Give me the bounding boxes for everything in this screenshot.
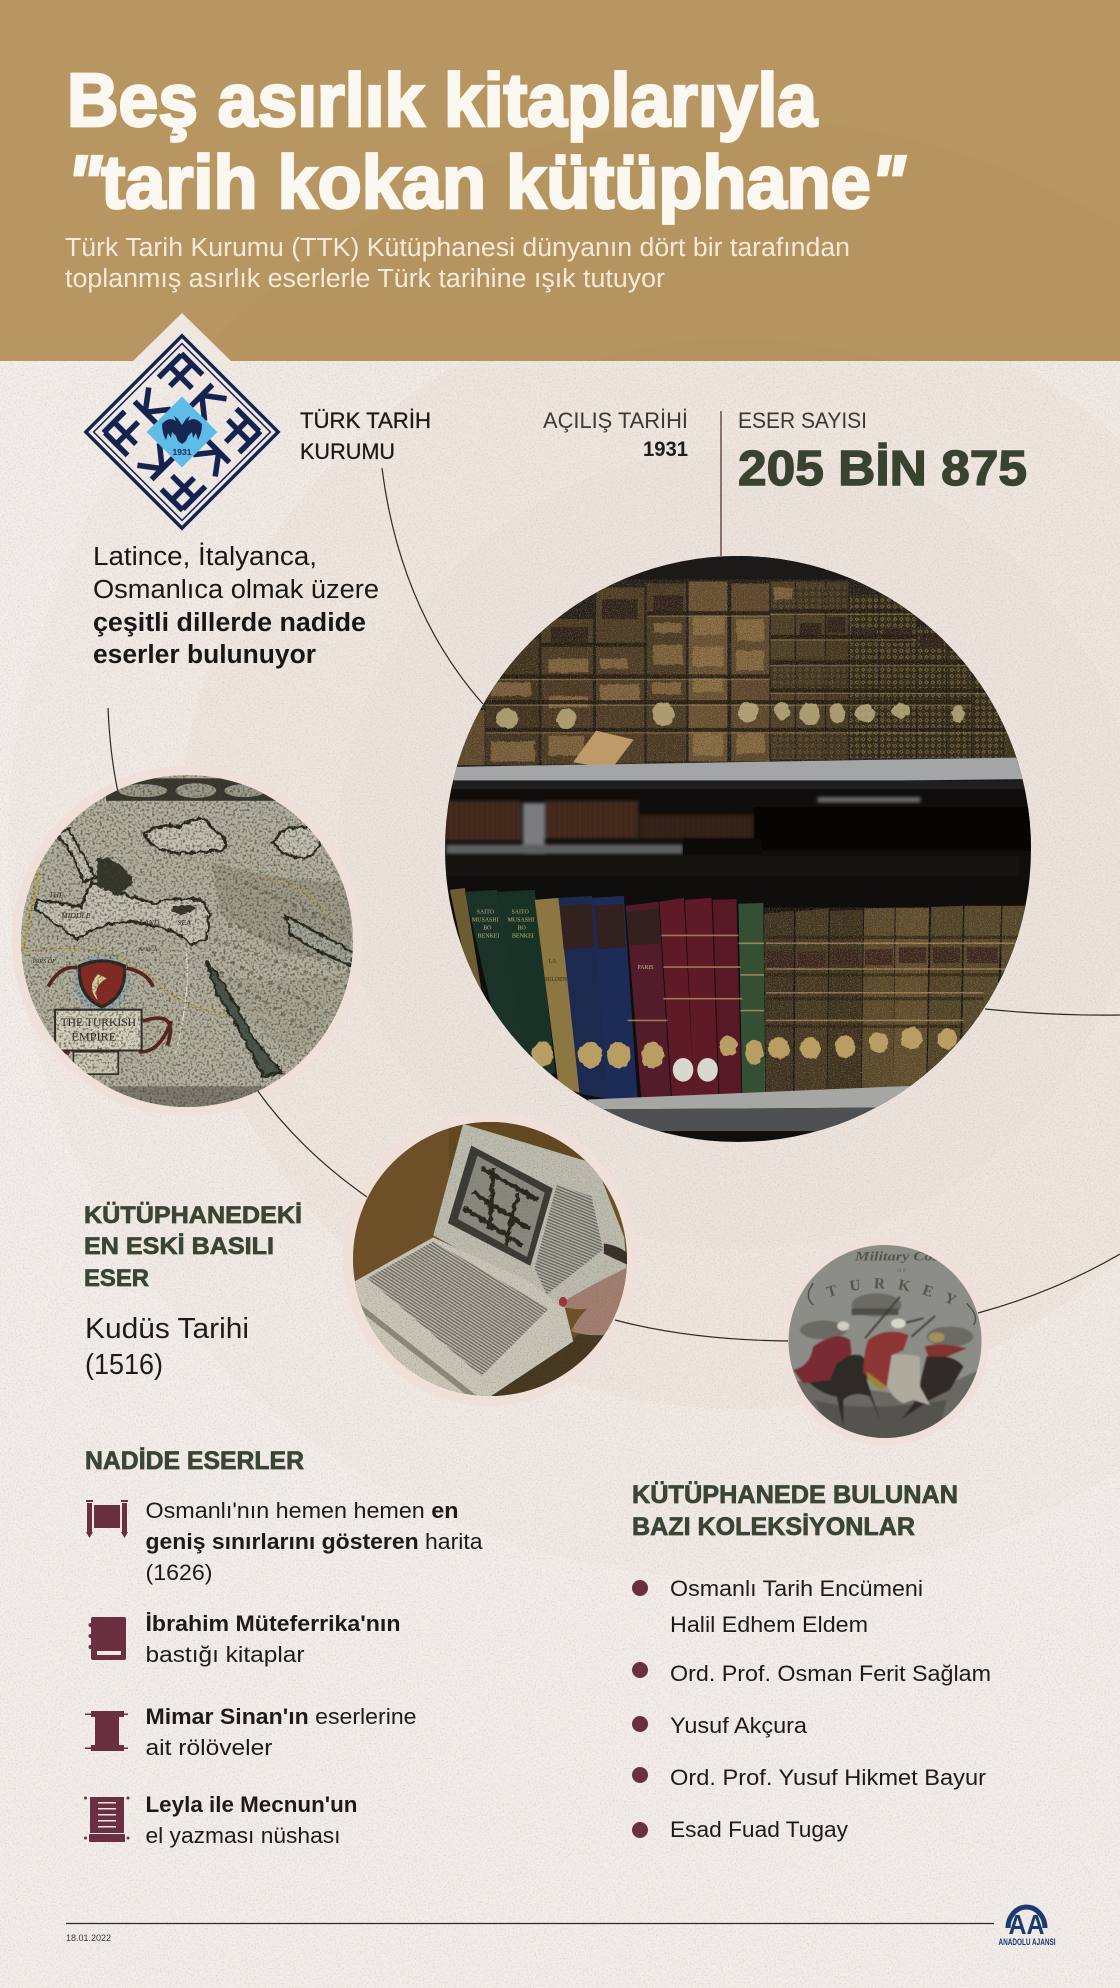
right page: [433, 1124, 628, 1309]
title: [67, 58, 906, 224]
photo: Military Costume of Turkey: [788, 1245, 982, 1438]
riders: [793, 1336, 852, 1383]
text block: languages: Latince, İtalyanca,: [93, 542, 317, 571]
text block: languages: Osmanlıca olmak üzere: [93, 576, 379, 604]
list: collections: Yusuf Akçura: [670, 1713, 808, 1738]
text: Kudüs Tarihi: (1516): [85, 1349, 163, 1381]
photo: bookshelf circle: [430, 540, 1050, 1142]
text: Mimar Sinan: Mimar Sinan'ın eserlerine: [146, 1704, 416, 1729]
ground: [787, 1367, 987, 1450]
title: "tarih kokan kütüphane": [67, 140, 906, 224]
heading: collections: [632, 1480, 958, 1541]
text: widest borders map: Osmanlı'nın hemen hemen en: [146, 1498, 458, 1523]
icon: book: [88, 1617, 126, 1660]
stat: number of works: [738, 408, 1027, 496]
stat: opening date: AÇILIŞ TARİHİ: [543, 408, 688, 433]
text: widest borders map: [146, 1498, 483, 1585]
spine titles: LA: [549, 959, 557, 965]
lower shelf: [588, 1086, 916, 1109]
left page: [352, 1237, 573, 1401]
text: Müteferrika: [146, 1611, 400, 1667]
list: collections: Halil Edhem Eldem: [670, 1612, 868, 1637]
aged leather patches: [491, 587, 792, 761]
spine titles: SAITO: [511, 910, 530, 916]
blue and red label panels: [560, 904, 661, 949]
page text column: [534, 1184, 603, 1294]
loose fragment: [573, 731, 634, 769]
woodcut: [448, 1146, 553, 1266]
spine medallions: [496, 702, 964, 729]
spine titles: BENKEI: [478, 933, 499, 939]
spine titles: BENKEI: [512, 933, 534, 939]
text: Müteferrika: bastığı kitaplar: [146, 1642, 305, 1667]
seas: [35, 819, 353, 1076]
stat: opening date: 1931: [643, 438, 688, 461]
white horse: [870, 1354, 930, 1405]
lower row books: [450, 888, 1027, 1101]
text: Kudüs Tarihi: Kudüs Tarihi: [85, 1313, 249, 1345]
photo: Turkish Empire map: [16, 772, 359, 1111]
bands lower row: [628, 935, 1023, 1020]
banners: [865, 1297, 935, 1338]
label: Türk Tarih Kurumu: KURUMU: [300, 439, 395, 464]
text: widest borders map: (1626): [146, 1560, 212, 1585]
map banner: [106, 778, 282, 801]
spine medallions lower: [532, 1027, 957, 1068]
date: 18.01.2022: [66, 1933, 111, 1943]
blurred back shelf: [446, 797, 920, 854]
heading: rare works: NADİDE ESERLER: [85, 1447, 304, 1475]
spine titles: BO: [518, 925, 527, 931]
photo halos: [12, 766, 989, 1446]
engraved title: Military Cost: [854, 1250, 944, 1264]
subtitle: Türk Tarih Kurumu (TTK) Kütüphanesi dünyanın dört bir tarafından: [65, 234, 850, 262]
stat: opening date: [543, 408, 688, 461]
text: Mimar Sinan: ait rölöveler: [146, 1735, 273, 1760]
subtitle: toplanmış asırlık eserlerle Türk tarihine ışık tutuyor: [65, 265, 666, 293]
icon: manuscript: [84, 1796, 130, 1842]
icon: scroll map: [86, 1500, 128, 1538]
photo: oldest printed book: [351, 1119, 632, 1401]
text: Leyla ile Mecnun: Leyla ile Mecnun'un: [146, 1792, 358, 1817]
hand: [604, 1243, 630, 1266]
text: Mimar Sinan: [146, 1704, 416, 1760]
list: collections: [632, 1576, 991, 1842]
logo: Anadolu Ajansı: AA: [1008, 1909, 1044, 1940]
stat: number of works: ESER SAYISI: [738, 408, 867, 433]
map labels: AFRICA: [138, 947, 158, 953]
engraved title: OF: [897, 1268, 908, 1274]
dark horses: [800, 1355, 880, 1427]
heading: oldest printed work: ESER: [84, 1265, 149, 1292]
logo: Anadolu Ajansı: ANADOLU AJANSI: [998, 1937, 1056, 1948]
map labels: THE: [49, 890, 64, 899]
spine titles: MUSASHI: [472, 918, 499, 924]
subtitle: [65, 234, 850, 293]
raised bands: [485, 611, 1019, 730]
spine titles: [472, 910, 654, 983]
title: Beş asırlık kitaplarıyla: [67, 58, 818, 142]
logo: Anadolu Ajansı: [998, 1907, 1056, 1948]
heading: collections: KÜTÜPHANEDE BULUNAN: [632, 1480, 958, 1509]
heading: oldest printed work: EN ESKİ BASILI: [84, 1233, 274, 1260]
spine titles: SELDEN: [544, 977, 568, 983]
map labels: [32, 890, 191, 965]
shelf: [446, 757, 1023, 785]
label: Türk Tarih Kurumu: TÜRK TARİH: [300, 408, 431, 433]
text: Leyla ile Mecnun: el yazması nüshası: [146, 1823, 340, 1848]
smoke: [800, 1293, 973, 1347]
spine titles: MUSASHI: [508, 918, 534, 924]
text: Kudüs Tarihi: [85, 1313, 249, 1381]
text block: languages: [93, 542, 379, 669]
cartouche: THE TURKISH: [61, 1017, 136, 1029]
icon: vertical scroll: [85, 1711, 128, 1751]
heading: oldest printed work: [84, 1202, 302, 1292]
list: collections: Ord. Prof. Osman Ferit Sağlam: [670, 1661, 991, 1686]
stat: number of works: 205 BİN 875: [738, 442, 1027, 496]
logo: Türk Tarih Kurumu: [86, 313, 278, 528]
text: Leyla ile Mecnun: [146, 1792, 358, 1848]
engraved title: TURKEY: [826, 1278, 958, 1304]
engraved title: [826, 1252, 958, 1304]
darker land: [212, 862, 351, 964]
label: Türk Tarih Kurumu: [300, 408, 431, 464]
list: collections: Esad Fuad Tugay: [670, 1817, 848, 1842]
footer rule: [66, 1922, 994, 1924]
map labels: PARS OF: [32, 959, 56, 965]
list: collections: Ord. Prof. Yusuf Hikmet Bayur: [670, 1765, 986, 1790]
header band: [0, 0, 1120, 361]
map labels: SEA: [177, 918, 191, 927]
heading: oldest printed work: KÜTÜPHANEDEKİ: [84, 1202, 302, 1229]
map labels: LAND: [139, 918, 160, 927]
spine titles: SAITO: [477, 910, 495, 916]
icon: double-headed eagle: [162, 416, 202, 444]
spine titles: BO: [483, 925, 492, 931]
list: collections: Osmanlı Tarih Encümeni: [670, 1576, 923, 1601]
text: widest borders map: geniş sınırlarını gösteren harita: [146, 1529, 483, 1554]
spine titles: PARIS: [637, 965, 654, 971]
heading: collections: BAZI KOLEKSİYONLAR: [632, 1513, 915, 1541]
text block: languages: çeşitli dillerde nadide: [93, 609, 366, 637]
logo: Türk Tarih Kurumu: 1931: [173, 447, 192, 457]
text: Müteferrika: İbrahim Müteferrika'nın: [146, 1611, 400, 1636]
connector lines: [108, 411, 1120, 1341]
river lines: [22, 870, 39, 952]
map labels: MIDDLE: [60, 911, 91, 920]
cartouche: [48, 953, 171, 1074]
text block: languages: eserler bulunuyor: [93, 641, 316, 669]
cartouche: EMPIRE: [71, 1032, 117, 1044]
top shelf books: [454, 582, 1020, 765]
